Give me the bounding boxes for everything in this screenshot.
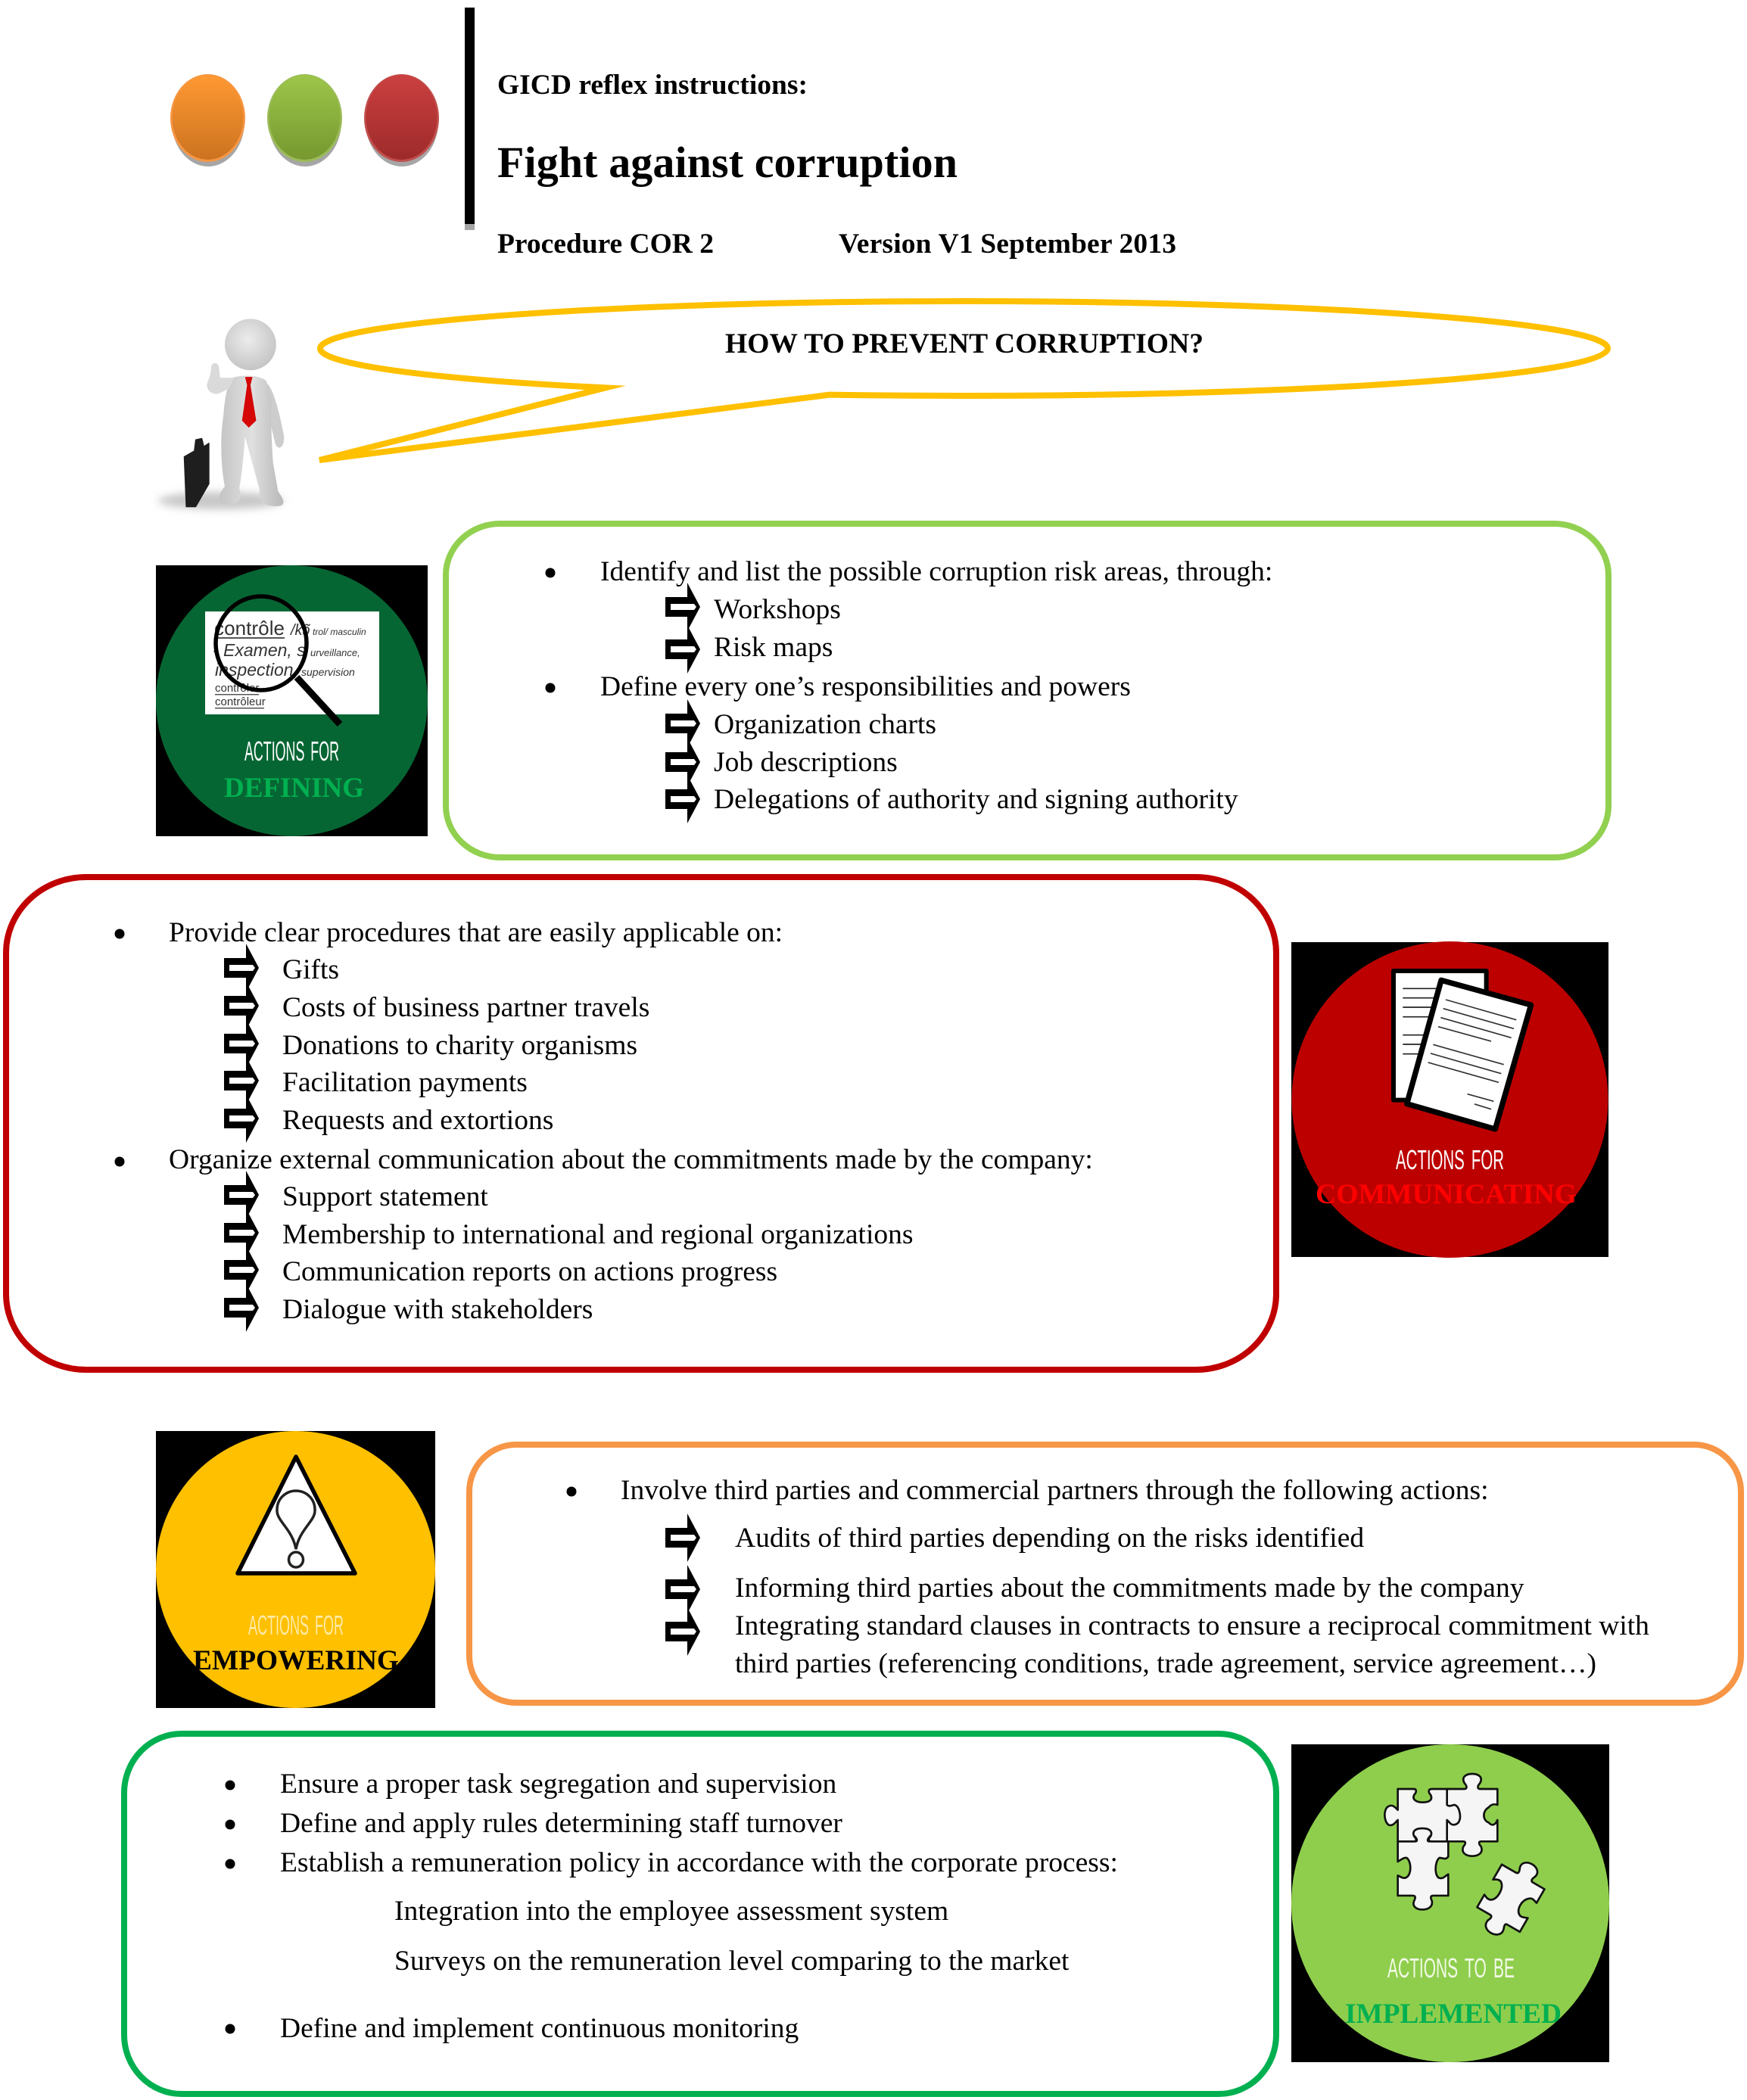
bullet list bbox=[566, 1475, 1649, 1679]
bullet list: Audits of third parties depending on the risks identified bbox=[735, 1523, 1364, 1554]
bullet list: Involve third parties and commercial partners through the following actions: bbox=[621, 1475, 1489, 1506]
bullet list: Costs of business partner travels bbox=[282, 992, 649, 1023]
bullet list bbox=[115, 917, 1093, 1332]
bullet list: Informing third parties about the commitments made by the company bbox=[735, 1573, 1524, 1604]
bullet list: Provide clear procedures that are easily applicable on: bbox=[169, 917, 783, 948]
bullet list: Integration into the employee assessment system bbox=[394, 1896, 948, 1927]
icon: two documents bbox=[1394, 971, 1531, 1129]
bullet list: Organize external communication about the commitments made by the company: bbox=[169, 1144, 1093, 1175]
bullet list bbox=[545, 556, 1272, 823]
dictionary snippet: contrôle bbox=[214, 617, 285, 639]
dictionary snippet bbox=[213, 617, 366, 708]
bullet list: Gifts bbox=[282, 954, 339, 985]
panel: defining actions bbox=[446, 524, 1608, 857]
badge keyword: DEFINING bbox=[224, 773, 364, 804]
badge: actions for defining: ACTIONS FOR bbox=[244, 736, 339, 767]
panel: empowering actions bbox=[469, 1445, 1741, 1703]
bullet list: Membership to international and regional organizations bbox=[282, 1219, 913, 1250]
badge: actions for empowering: ACTIONS FOR bbox=[248, 1610, 344, 1641]
bullet list: Communication reports on actions progress bbox=[282, 1256, 777, 1287]
bullet list: Define and implement continuous monitoring bbox=[280, 2013, 799, 2044]
badge: actions to be implemented bbox=[1291, 1744, 1609, 2062]
bullet list: Facilitation payments bbox=[282, 1067, 528, 1098]
icon: red button bbox=[364, 74, 439, 166]
bullet list: Define every one’s responsibilities and powers bbox=[600, 671, 1131, 702]
dictionary snippet: supervision bbox=[301, 666, 355, 678]
bullet list: Support statement bbox=[282, 1181, 488, 1212]
header text block bbox=[497, 70, 1176, 260]
panel: actions to be implemented bbox=[124, 1734, 1276, 2094]
dictionary snippet: contrôler bbox=[215, 682, 259, 695]
speech bubble bbox=[319, 301, 1608, 460]
icon: puzzle pieces bbox=[1384, 1774, 1552, 1945]
procedure reference: Procedure COR 2 bbox=[497, 229, 714, 260]
bullet list: Define and apply rules determining staff turnover bbox=[280, 1808, 842, 1839]
subtitle: GICD reflex instructions: bbox=[497, 70, 808, 101]
dictionary snippet: - Examen, s bbox=[213, 640, 306, 660]
badge caption: ACTIONS TO BE bbox=[1387, 1952, 1515, 1983]
icon: magnifying glass bbox=[216, 596, 340, 724]
dictionary snippet: /kɔ̃ bbox=[289, 622, 310, 639]
bubble heading: HOW TO PREVENT CORRUPTION? bbox=[725, 328, 1204, 359]
dictionary snippet: urveillance, bbox=[310, 647, 360, 658]
bullet list: Dialogue with stakeholders bbox=[282, 1294, 593, 1325]
bullet list: Identify and list the possible corruption risk areas, through: bbox=[600, 556, 1272, 587]
bullet list: Integrating standard clauses in contracts to ensure a reciprocal commitment with bbox=[735, 1610, 1649, 1641]
icon: warning triangle bbox=[238, 1457, 355, 1573]
panel: communicating actions bbox=[6, 877, 1276, 1370]
badge keyword: COMMUNICATING bbox=[1316, 1179, 1577, 1210]
bullet list: Job descriptions bbox=[714, 747, 898, 778]
icon: three traffic-light buttons bbox=[170, 74, 439, 166]
badge keyword: EMPOWERING bbox=[193, 1645, 399, 1676]
badge: actions for empowering bbox=[156, 1431, 435, 1708]
title: Fight against corruption bbox=[497, 138, 958, 187]
bullet list: Donations to charity organisms bbox=[282, 1030, 637, 1061]
vertical header bar bbox=[465, 8, 475, 230]
dictionary snippet: inspection, bbox=[215, 660, 298, 680]
badge: actions for defining bbox=[156, 565, 428, 836]
icon: green button bbox=[267, 74, 342, 166]
dictionary snippet: contrôleur bbox=[215, 695, 266, 708]
bullet list bbox=[226, 1769, 1118, 2044]
dictionary snippet: trol/ masculin bbox=[313, 627, 366, 637]
bullet list: Surveys on the remuneration level comparing to the market bbox=[394, 1946, 1070, 1977]
version: Version V1 September 2013 bbox=[839, 229, 1176, 260]
icon: orange button bbox=[170, 74, 245, 166]
bullet list: Requests and extortions bbox=[282, 1105, 553, 1136]
icon: 3D businessman with briefcase, thumbs up bbox=[158, 319, 284, 509]
bullet list: Organization charts bbox=[714, 709, 936, 740]
bullet list: Ensure a proper task segregation and supervision bbox=[280, 1769, 836, 1800]
bullet list: Delegations of authority and signing authority bbox=[714, 784, 1238, 815]
bullet list: third parties (referencing conditions, trade agreement, service agreement…) bbox=[735, 1648, 1596, 1679]
bullet list: Risk maps bbox=[714, 632, 833, 663]
bullet list: Establish a remuneration policy in accordance with the corporate process: bbox=[280, 1847, 1118, 1878]
badge caption: ACTIONS FOR bbox=[1396, 1144, 1504, 1175]
badge: actions for communicating bbox=[1291, 941, 1608, 1258]
bullet list: Workshops bbox=[714, 594, 841, 625]
badge keyword: IMPLEMENTED bbox=[1345, 1999, 1562, 2030]
